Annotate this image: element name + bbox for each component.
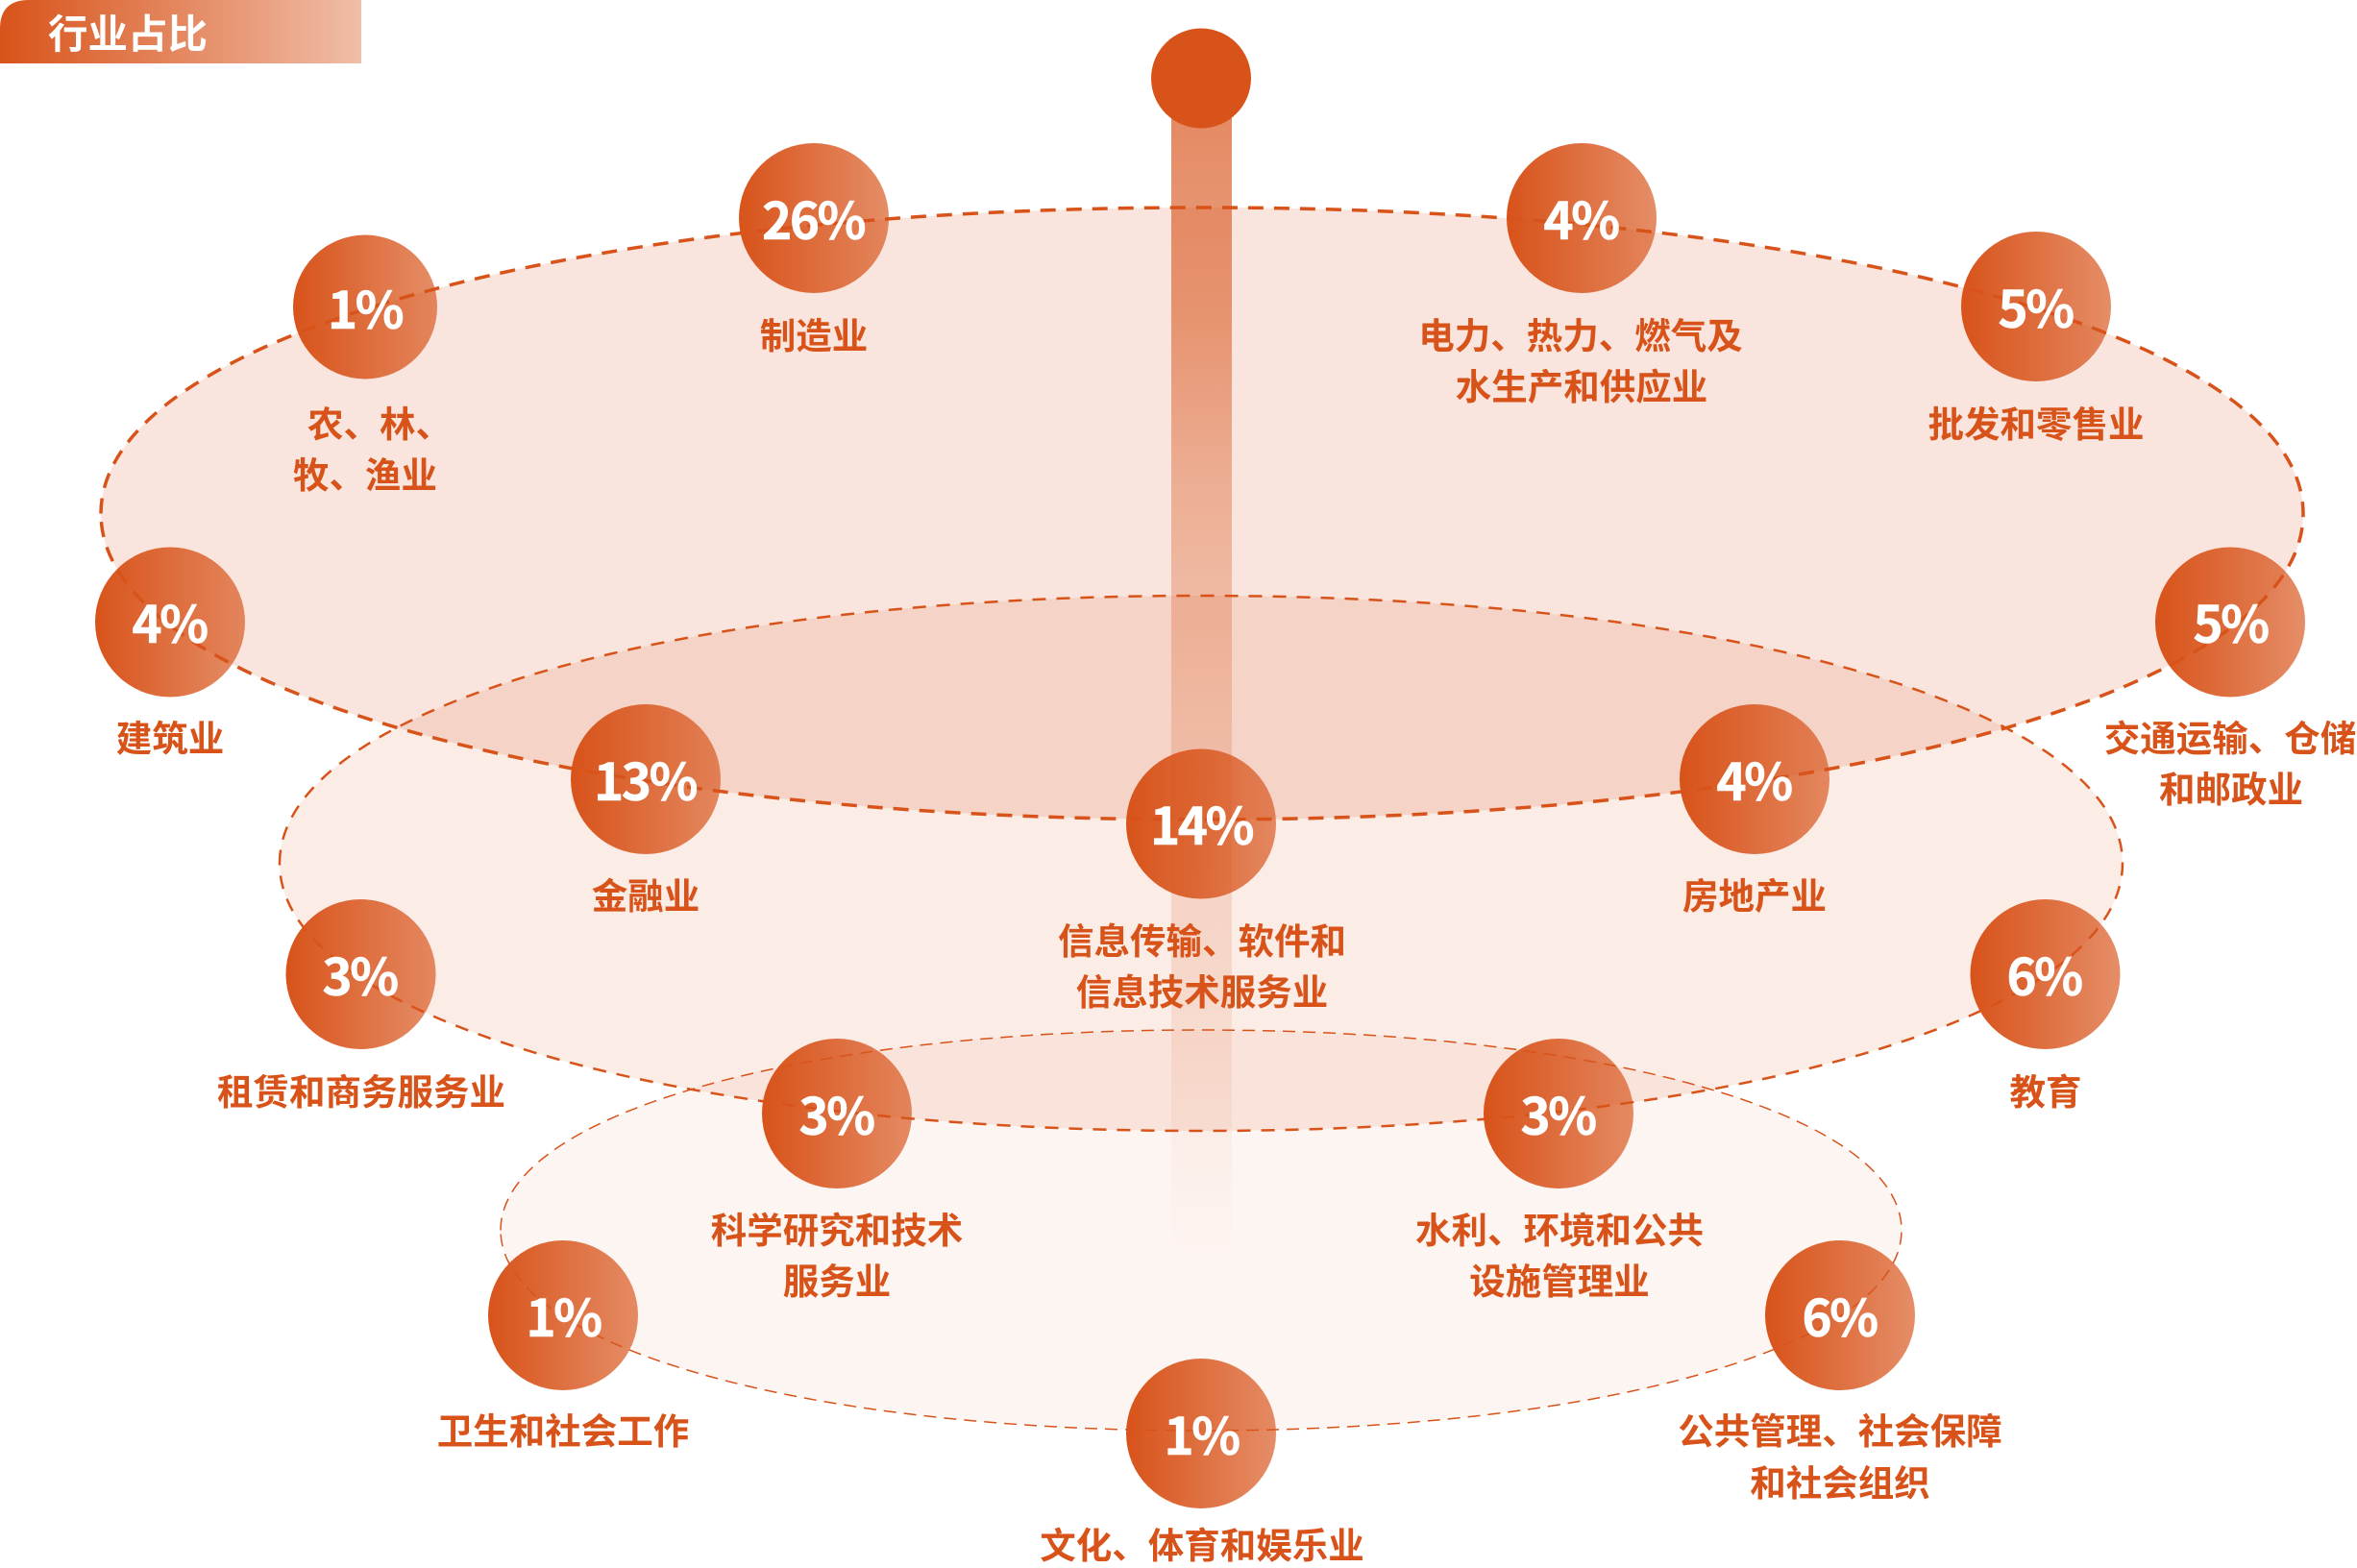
- item: 交通运输、仓储和邮政业 5%: 和邮政业: [2159, 770, 2303, 810]
- ellipse fills: three tiers: [101, 208, 2303, 1431]
- item: 公共管理、社会保障和社会组织 6%: 公共管理、社会保障: [1678, 1411, 2002, 1452]
- item: 水利、环境和公共设施管理业 3%: [1415, 1039, 1704, 1302]
- item: 信息传输、软件和信息技术服务业 14%: 信息传输、软件和: [1058, 921, 1346, 962]
- item: 交通运输、仓储和邮政业 5%: 交通运输、仓储: [2104, 719, 2356, 759]
- item: 建筑业 4%: 4%: [132, 585, 208, 658]
- item: 房地产业 4%: [1680, 704, 1829, 917]
- item: 科学研究和技术服务业 3%: 科学研究和技术: [711, 1211, 963, 1251]
- item: 租赁和商务服务业 3%: 租赁和商务服务业: [217, 1072, 505, 1113]
- item: 公共管理、社会保障和社会组织 6%: 6%: [1802, 1279, 1878, 1352]
- item: 科学研究和技术服务业 3%: 3%: [798, 1077, 874, 1150]
- item: 金融业 13%: [571, 704, 721, 917]
- item: 文化、体育和娱乐业 1%: 1%: [1164, 1397, 1240, 1470]
- central pillar: [1171, 115, 1232, 1259]
- item: 交通运输、仓储和邮政业 5%: [2104, 548, 2356, 810]
- item: 制造业 26%: 制造业: [760, 316, 868, 356]
- item: 农、林、牧、渔业 1%: 农、林、: [307, 404, 452, 445]
- item: 科学研究和技术服务业 3%: [711, 1039, 963, 1302]
- item: 卫生和社会工作 1%: [437, 1240, 689, 1452]
- item: 农、林、牧、渔业 1%: [293, 234, 452, 496]
- item: 金融业 13%: 13%: [594, 743, 697, 816]
- item: 水利、环境和公共设施管理业 3%: 3%: [1520, 1077, 1596, 1150]
- item: 教育 6%: 6%: [2006, 938, 2082, 1011]
- item: 金融业 13%: 金融业: [592, 876, 700, 917]
- item: 交通运输、仓储和邮政业 5%: 5%: [2193, 585, 2269, 658]
- item: 租赁和商务服务业 3%: 3%: [322, 938, 398, 1011]
- item: 农、林、牧、渔业 1%: 牧、渔业: [293, 455, 437, 496]
- title banner: [0, 0, 361, 63]
- title banner: 行业占比: [48, 12, 208, 57]
- item: 公共管理、社会保障和社会组织 6%: [1678, 1240, 2002, 1504]
- item: 批发和零售业 5%: 批发和零售业: [1927, 404, 2145, 445]
- item: 教育 6%: [1970, 899, 2120, 1113]
- item: 卫生和社会工作 1%: 1%: [526, 1279, 602, 1352]
- item: 卫生和社会工作 1%: 卫生和社会工作: [437, 1411, 689, 1452]
- item: 批发和零售业 5%: [1927, 232, 2145, 445]
- item: 制造业 26%: 26%: [762, 182, 865, 255]
- item: 科学研究和技术服务业 3%: 服务业: [783, 1262, 891, 1302]
- item: 农、林、牧、渔业 1%: 1%: [328, 271, 404, 344]
- item: 水利、环境和公共设施管理业 3%: 设施管理业: [1469, 1262, 1650, 1302]
- item: 房地产业 4%: 4%: [1716, 743, 1792, 816]
- item: 建筑业 4%: [95, 548, 245, 759]
- item: 建筑业 4%: 建筑业: [116, 719, 224, 759]
- item: 批发和零售业 5%: 5%: [1998, 270, 2074, 343]
- item: 信息传输、软件和信息技术服务业 14%: 信息技术服务业: [1076, 972, 1328, 1013]
- item: 信息传输、软件和信息技术服务业 14%: [1058, 749, 1346, 1013]
- item: 公共管理、社会保障和社会组织 6%: 和社会组织: [1750, 1463, 1930, 1504]
- item: 信息传输、软件和信息技术服务业 14%: 14%: [1150, 787, 1253, 860]
- item: 房地产业 4%: 房地产业: [1682, 876, 1827, 917]
- item: 文化、体育和娱乐业 1%: [1040, 1359, 1364, 1566]
- item: 教育 6%: 教育: [2010, 1072, 2081, 1113]
- item: 电力、热力、燃气及水生产和供应业 4%: 4%: [1543, 182, 1619, 255]
- item: 文化、体育和娱乐业 1%: 文化、体育和娱乐业: [1040, 1526, 1364, 1566]
- item: 制造业 26%: [739, 143, 889, 356]
- item: 电力、热力、燃气及水生产和供应业 4%: [1418, 143, 1743, 407]
- dashed ellipse outlines: [101, 208, 2303, 1431]
- item: 电力、热力、燃气及水生产和供应业 4%: 水生产和供应业: [1456, 367, 1707, 407]
- item: 租赁和商务服务业 3%: [217, 899, 505, 1113]
- item: 电力、热力、燃气及水生产和供应业 4%: 电力、热力、燃气及: [1418, 316, 1743, 356]
- item: 水利、环境和公共设施管理业 3%: 水利、环境和公共: [1415, 1211, 1704, 1251]
- pillar top dot: [1151, 29, 1251, 129]
